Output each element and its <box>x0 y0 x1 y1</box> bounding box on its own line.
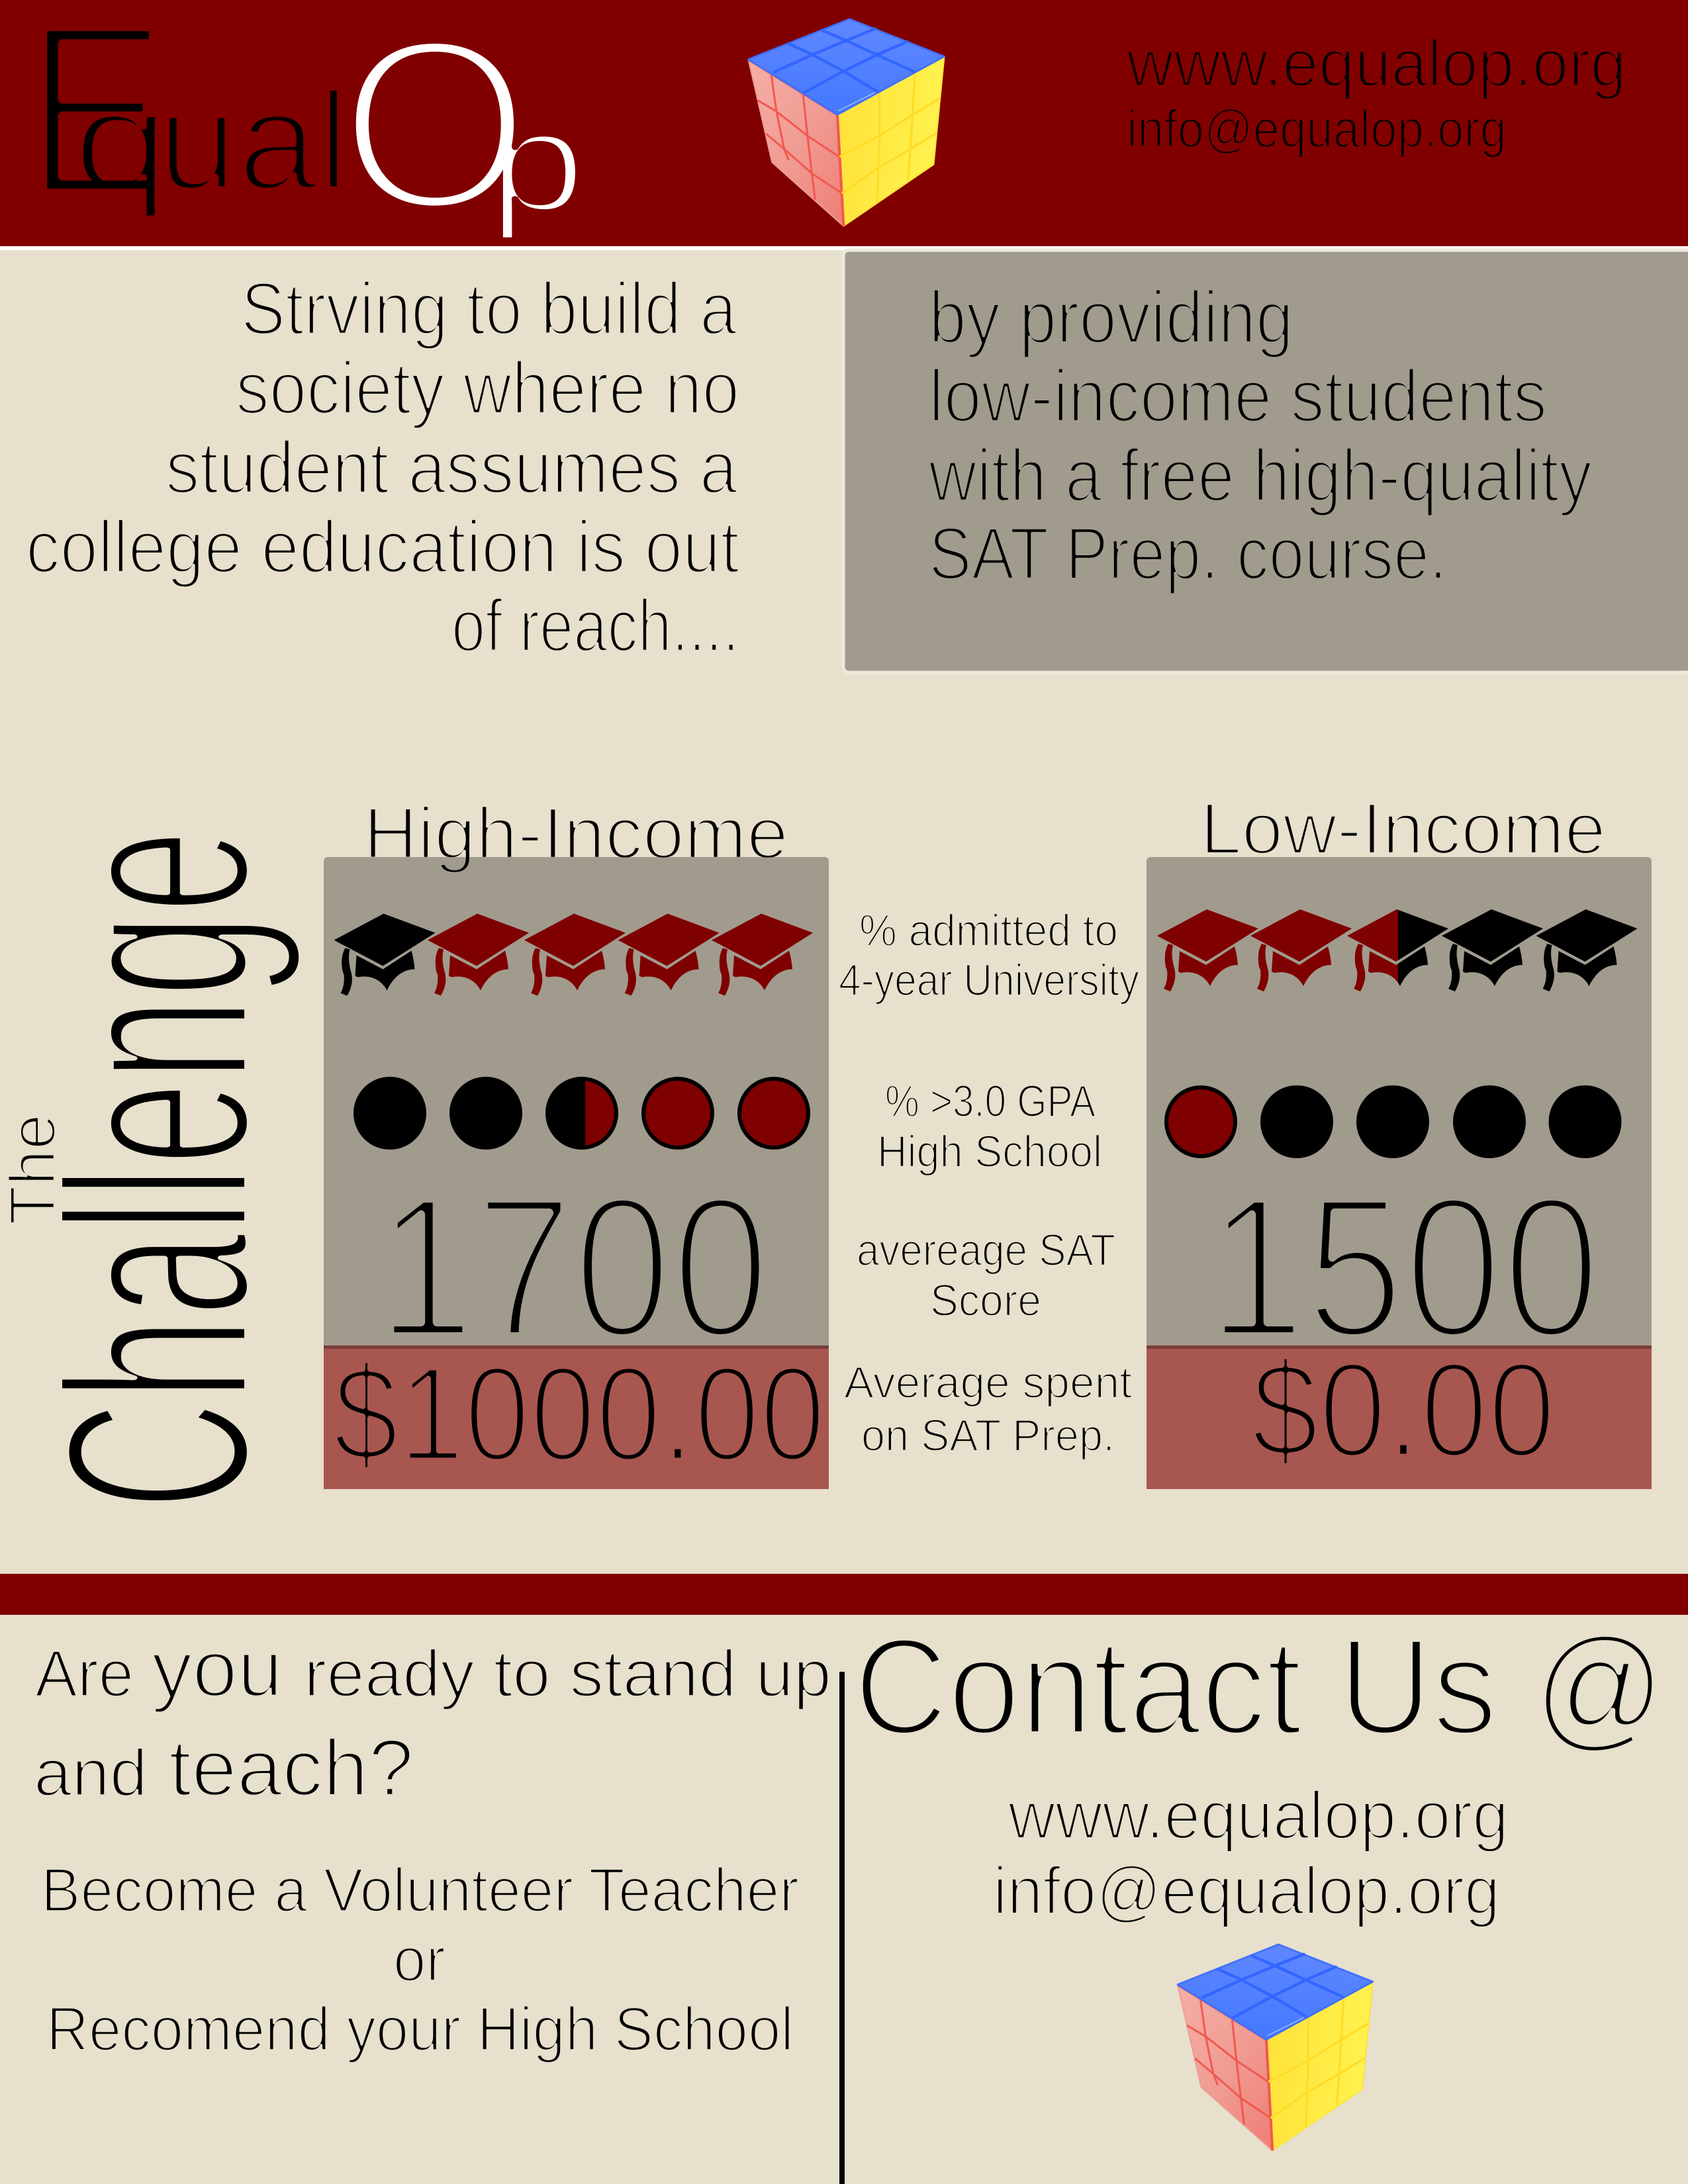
heading: Low-Income: Low-Income <box>1200 788 1606 870</box>
SAT score: low-income: 1500 <box>1207 1154 1601 1380</box>
row labels: 4-year University <box>839 955 1139 1005</box>
call to action: stand up and teach <box>34 1623 831 1813</box>
call to action: stand up and teach: you <box>152 1623 283 1713</box>
header contact text: info@equalop.org <box>1127 99 1507 158</box>
vertical divider <box>839 1672 845 2184</box>
call to action: stand up and teach: and <box>34 1736 148 1810</box>
mission statement text, left: college education is out <box>26 506 739 588</box>
header contact text: www.equalop.org <box>1126 26 1626 101</box>
contact details: info@equalop.org <box>993 1853 1500 1929</box>
mission statement text, left: of reach.... <box>451 584 739 667</box>
header contact text <box>1126 26 1626 158</box>
panel: mission statement, right: low-income students <box>929 355 1547 437</box>
call to action: stand up and teach: ready to stand up <box>304 1637 831 1711</box>
row labels: Score <box>930 1275 1041 1326</box>
row labels: Average spent <box>844 1357 1132 1408</box>
row labels: High School <box>877 1126 1102 1177</box>
score band: low-income <box>1147 1345 1652 1489</box>
panel: mission statement, right: by providing <box>929 276 1293 359</box>
mission statement text, left: student assumes a <box>165 426 738 509</box>
panel: high-income <box>324 857 829 1489</box>
panel: mission statement, right <box>843 250 1688 672</box>
row labels: % admitted to <box>859 905 1118 956</box>
heading: Contact Us @: Contact Us @ <box>854 1610 1665 1764</box>
row labels: on SAT Prep. <box>861 1410 1115 1461</box>
header band <box>0 0 1688 250</box>
heading: High-Income: High-Income <box>363 793 788 874</box>
call to action: volunteer options: or <box>393 1925 445 1994</box>
heading: The Challenge: Challenge <box>11 829 306 1510</box>
logo: EqualOp <box>25 0 586 260</box>
SAT spending: high-income: $1000.00 <box>333 1338 825 1490</box>
row labels: % >3.0 GPA <box>885 1076 1096 1126</box>
call to action: stand up and teach: teach? <box>169 1723 414 1813</box>
icon: cube in header <box>748 19 945 226</box>
divider band <box>0 1574 1688 1615</box>
panel: mission statement, right: SAT Prep. course. <box>929 512 1447 595</box>
icon row: GPA circles, high-income <box>353 1077 808 1150</box>
mission statement text, left: Strving to build a <box>241 267 737 350</box>
row labels <box>839 905 1139 1461</box>
contact details: www.equalop.org <box>1008 1778 1509 1853</box>
mission statement text, left: society where no <box>236 347 739 430</box>
logo: EqualOp: ual <box>158 62 350 219</box>
score band: high-income <box>324 1345 829 1489</box>
SAT score: high-income: 1700 <box>377 1154 770 1380</box>
call to action: volunteer options <box>41 1855 799 2064</box>
icon row: graduation caps, high-income <box>334 913 813 995</box>
SAT spending: low-income: $0.00 <box>1251 1334 1556 1486</box>
logo: EqualOp: p <box>488 81 586 241</box>
icon: cube at bottom <box>1178 1944 1373 2151</box>
panel: low-income <box>1147 857 1652 1489</box>
mission statement text, left <box>26 267 739 667</box>
row labels: avereage SAT <box>857 1225 1115 1275</box>
call to action: volunteer options: Recomend your High School <box>46 1994 794 2064</box>
call to action: stand up and teach: Are <box>35 1637 134 1711</box>
call to action: volunteer options: Become a Volunteer Teacher <box>41 1855 799 1925</box>
logo: EqualOp: q <box>72 62 170 219</box>
panel: mission statement, right: with a free high-quality <box>928 434 1592 517</box>
icon row: graduation caps, low-income <box>1157 909 1638 991</box>
contact details <box>993 1778 1509 1929</box>
icon row: GPA circles, low-income <box>1166 1085 1622 1158</box>
heading: The Challenge <box>0 829 306 1510</box>
